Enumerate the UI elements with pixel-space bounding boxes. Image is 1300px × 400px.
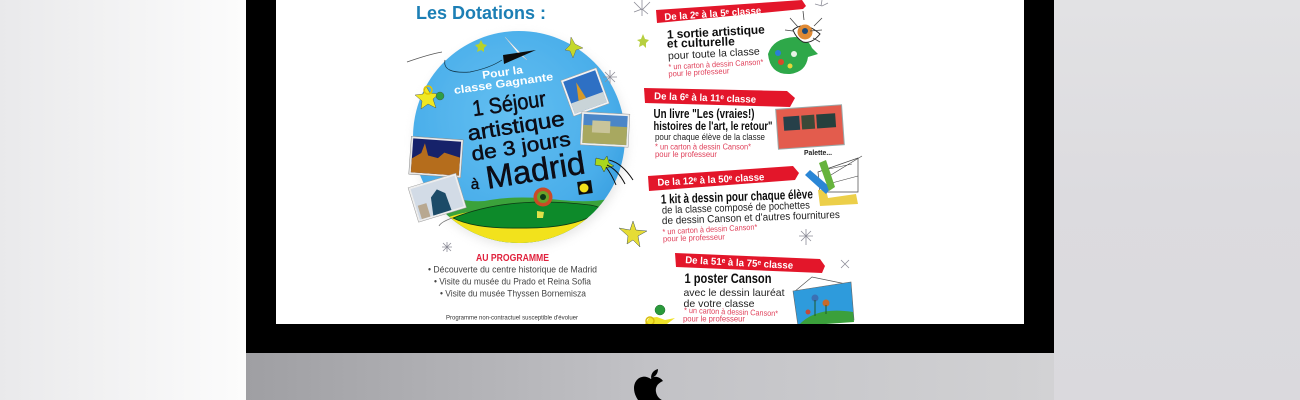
panel: prize 51 to 75 [645, 253, 854, 326]
prize text: 1 sortie artistique [666, 22, 765, 42]
icon: flag [537, 211, 544, 218]
icon: star lower right [619, 221, 647, 247]
panel: prize 12 to 50 [648, 156, 862, 244]
photo: palace [580, 112, 630, 147]
prize text: 1 poster Canson [684, 270, 772, 286]
text: au programme: • Visite du musée du Prado et Reina Sofia [434, 276, 592, 288]
prize text: Un livre "Les (vraies!) [654, 106, 754, 121]
ribbon [675, 253, 825, 273]
text: 1 séjour artistique de 3 jours à Madrid: artistique [466, 108, 566, 146]
icon: red book [776, 105, 844, 149]
prize text: de dessin Canson et d'autres fournitures [662, 209, 840, 227]
text: au programme: • Visite du musée Thyssen Bornemisza [440, 288, 587, 300]
panel: prize 2 to 5 [656, 0, 822, 79]
sky disc [410, 28, 630, 250]
text: au programme [428, 252, 597, 322]
prize text: * un carton à dessin Canson* [684, 306, 778, 318]
prize text: de votre classe [684, 298, 755, 310]
prize text: histoires de l'art, le retour" [654, 119, 772, 133]
prize text [666, 22, 765, 79]
prize text: * un carton à dessin Canson* [662, 223, 758, 236]
prize text: et culturelle [667, 34, 735, 51]
ribbon label: De la 2ᵉ à la 5ᵉ classe [664, 6, 762, 23]
text: 1 séjour artistique de 3 jours à Madrid: 1 Séjour [471, 86, 547, 121]
prize text: pour le professeur [668, 66, 730, 79]
icon: shooting star [595, 156, 633, 185]
prize text: pour le professeur [683, 314, 745, 324]
prize text [654, 106, 772, 159]
icon: small star on disc [475, 40, 487, 52]
prize text: pour le professeur [655, 150, 717, 159]
heading: Les Dotations: Les Dotations : [416, 2, 546, 23]
icon: target [534, 188, 552, 206]
icon: drawing kit [805, 156, 862, 206]
icon: spark top [634, 0, 849, 268]
ribbon label: De la 6ᵉ à la 11ᵉ classe [654, 91, 757, 106]
prize text: pour toute la classe [668, 46, 760, 62]
panel: Madrid prize disc [407, 28, 633, 250]
text: 1 séjour artistique de 3 jours à Madrid: à [471, 176, 480, 193]
ribbon label: De la 12ᵉ à la 50ᵉ classe [657, 172, 765, 189]
prize text: pour chaque élève de la classe [655, 132, 765, 142]
icon: black square sun [577, 180, 593, 195]
prize text: pour le professeur [663, 232, 725, 244]
icon: apple logo [634, 369, 663, 400]
background right [1054, 0, 1300, 400]
ribbon [644, 88, 795, 107]
ribbon label: De la 51ᵉ à la 75ᵉ classe [685, 255, 794, 272]
background left [0, 0, 246, 400]
ribbon [648, 166, 799, 191]
text: 1 séjour artistique de 3 jours à Madrid [468, 94, 584, 190]
text: pour la classe gagnante [454, 66, 553, 94]
text: pour la classe gagnante: classe Gagnante [453, 71, 554, 97]
icon: yellow star bottom [645, 305, 675, 325]
text: au programme: Programme non-contractuel susceptible d'évoluer [446, 314, 579, 322]
photo: night city [409, 136, 463, 178]
screen [276, 0, 1024, 326]
prize text: * un carton à dessin Canson* [655, 142, 751, 152]
icon: star top [565, 37, 583, 58]
disc shadow [415, 35, 627, 247]
icon: yellow star left [415, 86, 444, 109]
caption: palette: Palette... [804, 150, 832, 157]
icon: bird [407, 37, 536, 72]
prize text [661, 186, 840, 244]
icon: spark left [439, 70, 617, 252]
photo: cathedral [561, 68, 609, 116]
icon: star centre [637, 34, 649, 48]
text: 1 séjour artistique de 3 jours à Madrid: Madrid [483, 145, 587, 196]
prize text: avec le dessin lauréat [684, 287, 785, 299]
monitor chin [246, 353, 1054, 400]
text: au programme: AU PROGRAMME [476, 252, 549, 264]
photo: bear statue [408, 173, 466, 222]
ribbon [656, 0, 806, 23]
prize text: 1 kit à dessin pour chaque élève [661, 186, 813, 207]
monitor bezel [246, 0, 1054, 353]
text: au programme: • Découverte du centre historique de Madrid [428, 264, 597, 276]
prize text [683, 270, 785, 324]
icon: poster [793, 277, 854, 326]
text: 1 séjour artistique de 3 jours à Madrid: de 3 jours [470, 128, 572, 166]
panel: prize 6 to 11 [644, 88, 844, 159]
icon: palette and eye [768, 11, 822, 74]
prize text: * un carton à dessin Canson* [668, 58, 764, 71]
text: pour la classe gagnante: Pour la [481, 64, 525, 82]
prize text: de la classe composé de pochettes [662, 199, 810, 217]
